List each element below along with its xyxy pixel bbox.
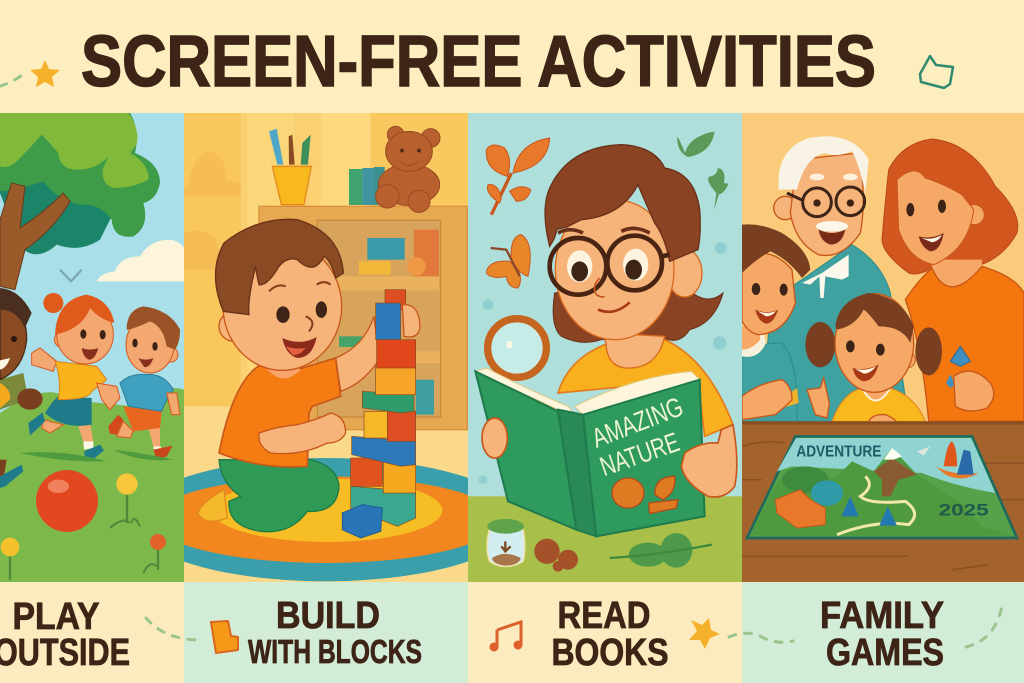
bookshelf <box>259 206 467 430</box>
board game <box>747 436 1017 538</box>
board title: ADVENTURE <box>796 443 881 460</box>
right hand and arm <box>681 425 737 497</box>
back hair <box>553 280 723 342</box>
cover leaves <box>612 476 678 514</box>
icon: green outlined tag <box>920 56 953 88</box>
label band: family games <box>729 582 1024 683</box>
panel: read books <box>468 113 742 582</box>
ball highlight <box>48 480 69 493</box>
hand on tower <box>402 305 420 337</box>
bird <box>60 270 82 281</box>
mother <box>882 139 1024 421</box>
book subtitle: NATURE <box>596 426 683 482</box>
label band: build with blocks: BUILD <box>276 595 380 637</box>
boy building <box>198 219 379 532</box>
label band: play outside <box>0 582 184 683</box>
flowers <box>1 473 166 580</box>
grandfather <box>762 136 909 421</box>
green leaves <box>677 131 729 210</box>
teddy bear <box>376 126 440 212</box>
block tower <box>351 290 416 526</box>
glasses and eyes <box>550 228 670 312</box>
table <box>742 421 1024 582</box>
hand holding game piece <box>946 346 994 411</box>
books on shelf <box>349 167 385 205</box>
board year: 2025 <box>939 501 989 520</box>
acorns <box>534 539 578 572</box>
boy left <box>742 224 810 421</box>
panel: family games <box>742 113 1024 582</box>
label band: play outside: PLAY <box>12 596 100 638</box>
label band: read books: BOOKS <box>552 632 668 674</box>
child: dark skin <box>0 288 43 488</box>
label band: build with blocks <box>146 582 468 683</box>
cloud <box>97 240 184 281</box>
orange leaf sprig <box>486 138 550 215</box>
rug <box>132 458 519 581</box>
label band: read books <box>468 582 742 683</box>
tree <box>0 113 160 290</box>
grass <box>0 388 184 582</box>
face <box>555 200 674 340</box>
glass jar <box>487 519 525 566</box>
left hand <box>482 418 507 458</box>
wall columns <box>184 113 468 582</box>
label band: read books: READ <box>558 595 650 637</box>
butterfly <box>486 235 530 288</box>
child: boy in blue <box>108 306 180 460</box>
loose block <box>342 505 382 538</box>
magnifying glass <box>488 319 546 377</box>
girl with pigtails <box>805 293 942 428</box>
neck <box>605 333 665 368</box>
leaves on ground <box>610 533 712 568</box>
grass <box>468 496 742 582</box>
child: red-haired girl <box>28 293 120 461</box>
title: SCREEN-FREE ACTIVITIES <box>81 22 876 102</box>
label band: family games: FAMILY <box>820 595 944 637</box>
top hair <box>545 145 700 261</box>
book title: AMAZING <box>587 391 687 454</box>
label band: build with blocks: WITH BLOCKS <box>248 633 422 670</box>
grass tufts <box>20 450 173 462</box>
pencil cup <box>269 129 311 205</box>
ear <box>667 249 702 297</box>
green book <box>475 368 705 536</box>
shirt <box>558 340 733 436</box>
panel: build with blocks <box>184 113 468 582</box>
panel: play outside <box>0 113 184 582</box>
icon: star with dashed trail <box>0 60 60 87</box>
label band: family games: GAMES <box>826 632 944 674</box>
decorative dots <box>479 242 727 484</box>
red ball <box>36 470 98 532</box>
